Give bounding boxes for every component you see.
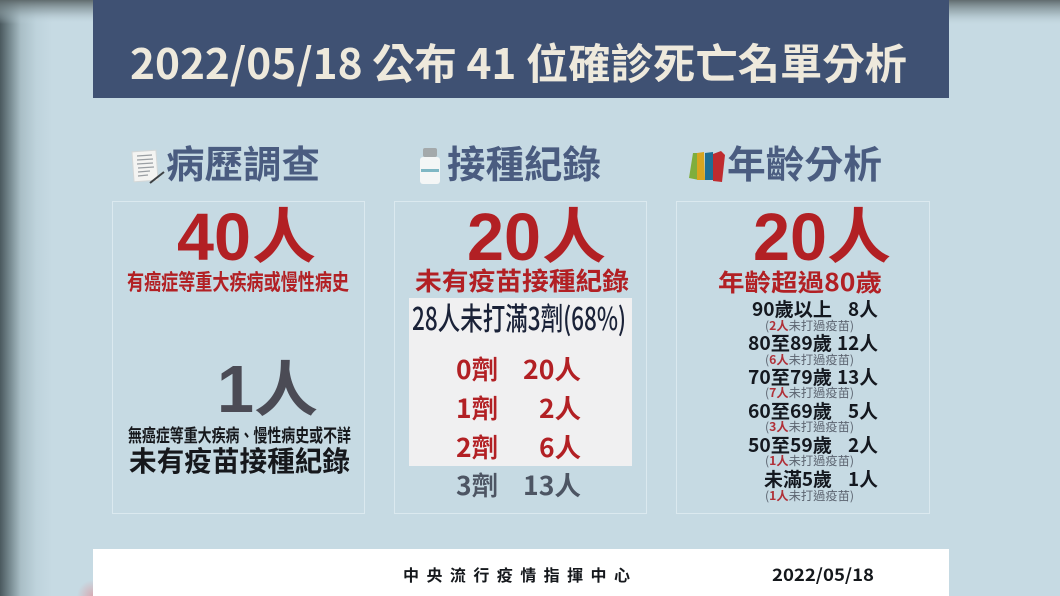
dose row 0	[456, 350, 581, 387]
icon: vaccine vial	[420, 148, 440, 184]
stat caption: 無癌症等重大疾病、慢性病史或不詳	[128, 422, 351, 448]
icon: document and pen	[132, 150, 164, 183]
stat: 20 people: 人	[827, 189, 891, 276]
age row 50-59: 2人	[848, 431, 878, 458]
icon: books	[689, 151, 725, 182]
panel frame	[676, 202, 930, 514]
age row 80-89	[748, 329, 878, 356]
age row 50-59: 50至59歲	[748, 431, 832, 458]
age row 90+: 90歲以上	[752, 295, 832, 322]
dose row 3	[456, 466, 581, 503]
panel frame	[394, 202, 646, 514]
dose row 1	[456, 389, 581, 426]
stat: 40 people: 人	[252, 189, 316, 276]
age row under 5: 未滿5歲	[764, 465, 832, 492]
stat caption: 未有疫苗接種紀錄	[415, 262, 629, 298]
footer	[93, 549, 949, 596]
stat: 20 people: 人	[542, 189, 606, 276]
age row 70-79: 13人	[837, 363, 878, 390]
unvaccinated 90+: (2人未打過疫苗)	[765, 317, 854, 334]
stat: 20 people: 20	[753, 200, 827, 275]
heading: 病歷調查	[166, 134, 320, 189]
stat: 20 people	[753, 189, 891, 276]
dose row 1: 1劑	[456, 389, 498, 426]
no vaccine record: 未有疫苗接種紀錄	[129, 440, 350, 480]
stat: 1 person: 人	[254, 342, 318, 429]
panel: age analysis	[676, 134, 930, 514]
unvaccinated 80-89: (6人未打過疫苗)	[765, 351, 854, 368]
panel: medical history	[112, 134, 364, 514]
dose row 2: 6人	[539, 428, 581, 465]
dose row 3: 13人	[523, 466, 581, 503]
age row 60-69	[748, 397, 878, 424]
age row 80-89: 80至89歲	[748, 329, 832, 356]
age row 90+: 8人	[848, 295, 878, 322]
stat caption: 年齡超過80歲	[718, 263, 882, 298]
dose table background	[409, 298, 632, 466]
age row 50-59	[748, 431, 878, 458]
panel: vaccination record	[394, 134, 646, 514]
unvaccinated 70-79: (7人未打過疫苗)	[765, 384, 854, 401]
heading: 年齡分析	[727, 134, 882, 189]
dose row 0: 20人	[523, 350, 581, 387]
footer date: 2022/05/18	[772, 561, 874, 586]
age row under 5: 1人	[848, 465, 878, 492]
dose row 0: 0劑	[456, 350, 498, 387]
stat: 40 people	[177, 189, 316, 276]
age row under 5	[764, 465, 878, 492]
stat caption: 有癌症等重大疾病或慢性病史	[127, 265, 349, 297]
stat: 1 person	[217, 342, 318, 429]
dose row 1: 2人	[539, 389, 581, 426]
stat: 1 person: 1	[217, 352, 254, 427]
panel frame	[112, 202, 364, 514]
unvaccinated under 5: (1人未打過疫苗)	[765, 487, 854, 504]
age row 60-69: 60至69歲	[748, 397, 832, 424]
unvaccinated 60-69: (3人未打過疫苗)	[765, 418, 854, 435]
title: 2022/05/18 公布 41 位確診死亡名單分析	[130, 31, 907, 92]
dose row 2	[456, 428, 581, 465]
dose row 3: 3劑	[456, 466, 498, 503]
stat: 20 people	[467, 189, 606, 276]
age row 60-69: 5人	[848, 397, 878, 424]
stat: 40 people: 40	[177, 200, 251, 275]
heading: 接種紀錄	[447, 134, 601, 189]
age row 70-79	[748, 363, 878, 390]
dose summary: 28人未打滿3劑(68%)	[412, 294, 626, 339]
title banner	[93, 0, 949, 98]
dose row 2: 2劑	[456, 428, 498, 465]
age row 90+	[752, 295, 878, 322]
stat: 20 people: 20	[467, 200, 541, 275]
unvaccinated 50-59: (1人未打過疫苗)	[765, 452, 854, 469]
source organisation: 中央流行疫情指揮中心	[403, 562, 630, 586]
age row 70-79: 70至79歲	[748, 363, 832, 390]
age row 80-89: 12人	[837, 329, 878, 356]
